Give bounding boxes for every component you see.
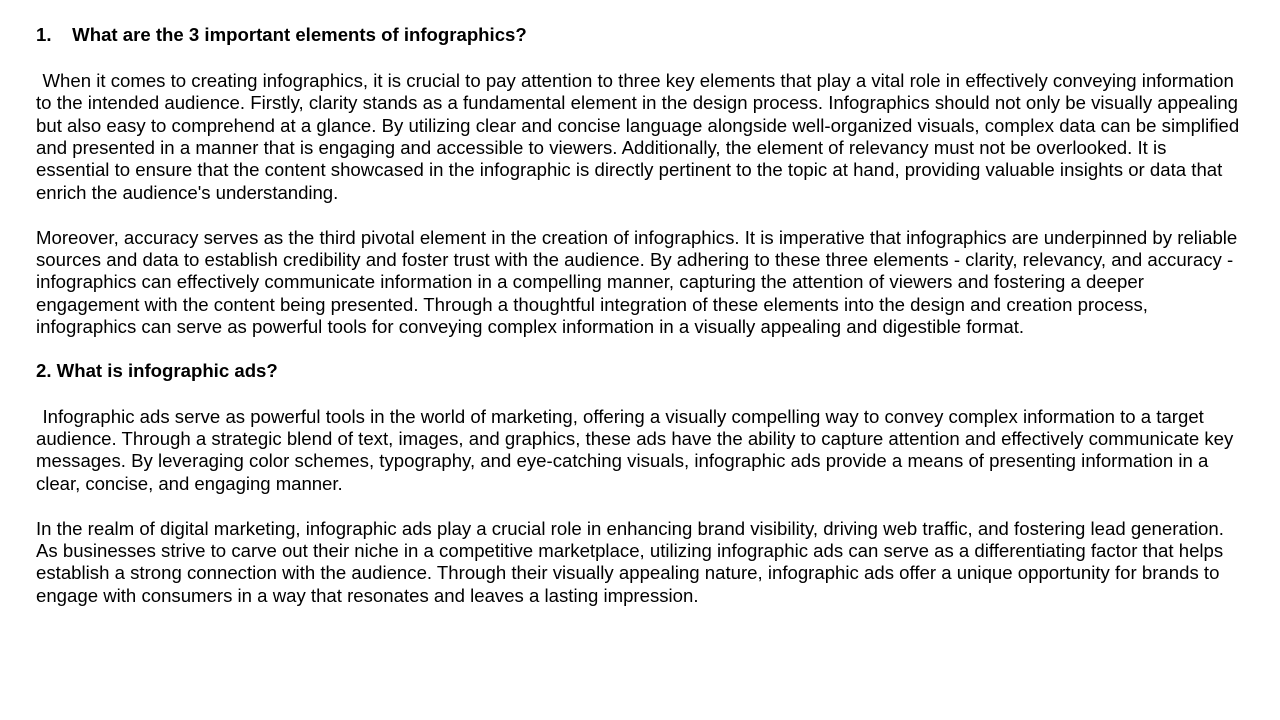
heading: question 2: 2. What is infographic ads?	[36, 360, 278, 381]
text block: accuracy paragraph	[36, 227, 1237, 337]
text block: clarity and relevancy paragraph: enrich the audience's understanding.	[36, 182, 338, 203]
text block: clarity and relevancy paragraph: and presented in a manner that is engaging and accessible to viewers. Additionally, the element of relevancy must not be overlooked. It is	[36, 137, 1166, 158]
text block: infographic ads definition paragraph: messages. By leveraging color schemes, typography, and eye-catching visuals, infographic ads provide a means of presenting information in a	[36, 450, 1208, 471]
text block: digital marketing paragraph: In the realm of digital marketing, infographic ads play a crucial role in enhancing brand visibility, driving web traffic, and fostering lead generation.	[36, 518, 1224, 539]
text block: accuracy paragraph: infographics can effectively communicate information in a compelling manner, capturing the attention of viewers and fostering a deeper	[36, 271, 1144, 292]
text block: infographic ads definition paragraph	[36, 406, 1234, 494]
text block: infographic ads definition paragraph: Infographic ads serve as powerful tools in the world of marketing, offering a visually compelling way to convey complex information to a target	[42, 406, 1204, 427]
text block: accuracy paragraph: Moreover, accuracy serves as the third pivotal element in the creation of infographics. It is imperative that infographics are underpinned by reliable	[36, 227, 1237, 248]
text block: infographic ads definition paragraph: clear, concise, and engaging manner.	[36, 473, 343, 494]
text block: clarity and relevancy paragraph: but also easy to comprehend at a glance. By utilizing clear and concise language alongside well-organized visuals, complex data can be simplified	[36, 115, 1239, 136]
text block: digital marketing paragraph	[36, 518, 1224, 606]
text block: clarity and relevancy paragraph: essential to ensure that the content showcased in the infographic is directly pertinent to the topic at hand, providing valuable insights or data that	[36, 159, 1222, 180]
text block: accuracy paragraph: infographics can serve as powerful tools for conveying complex information in a visually appealing and digestible format.	[36, 316, 1024, 337]
text block: accuracy paragraph: sources and data to establish credibility and foster trust with the audience. By adhering to these three elements - clarity, relevancy, and accuracy -	[36, 249, 1233, 270]
text block: clarity and relevancy paragraph: to the intended audience. Firstly, clarity stands as a fundamental element in the design process. Infographics should not only be visually appealing	[36, 92, 1238, 113]
text block: digital marketing paragraph: engage with consumers in a way that resonates and leaves a lasting impression.	[36, 585, 699, 606]
text block: digital marketing paragraph: As businesses strive to carve out their niche in a competitive marketplace, utilizing infographic ads can serve as a differentiating factor that helps	[36, 540, 1223, 561]
text block: infographic ads definition paragraph: audience. Through a strategic blend of text, images, and graphics, these ads have the ability to capture attention and effectively communicate key	[36, 428, 1233, 449]
text block: clarity and relevancy paragraph: When it comes to creating infographics, it is crucial to pay attention to three key elements that play a vital role in effectively conveying information	[42, 70, 1234, 91]
heading: question 1: 1. What are the 3 important elements of infographics?	[36, 24, 527, 45]
text block: accuracy paragraph: engagement with the content being presented. Through a thoughtful integration of these elements into the design and creation process,	[36, 294, 1148, 315]
text block: digital marketing paragraph: establish a strong connection with the audience. Through their visually appealing nature, infographic ads offer a unique opportunity for brands to	[36, 562, 1219, 583]
text block: clarity and relevancy paragraph	[36, 70, 1239, 203]
